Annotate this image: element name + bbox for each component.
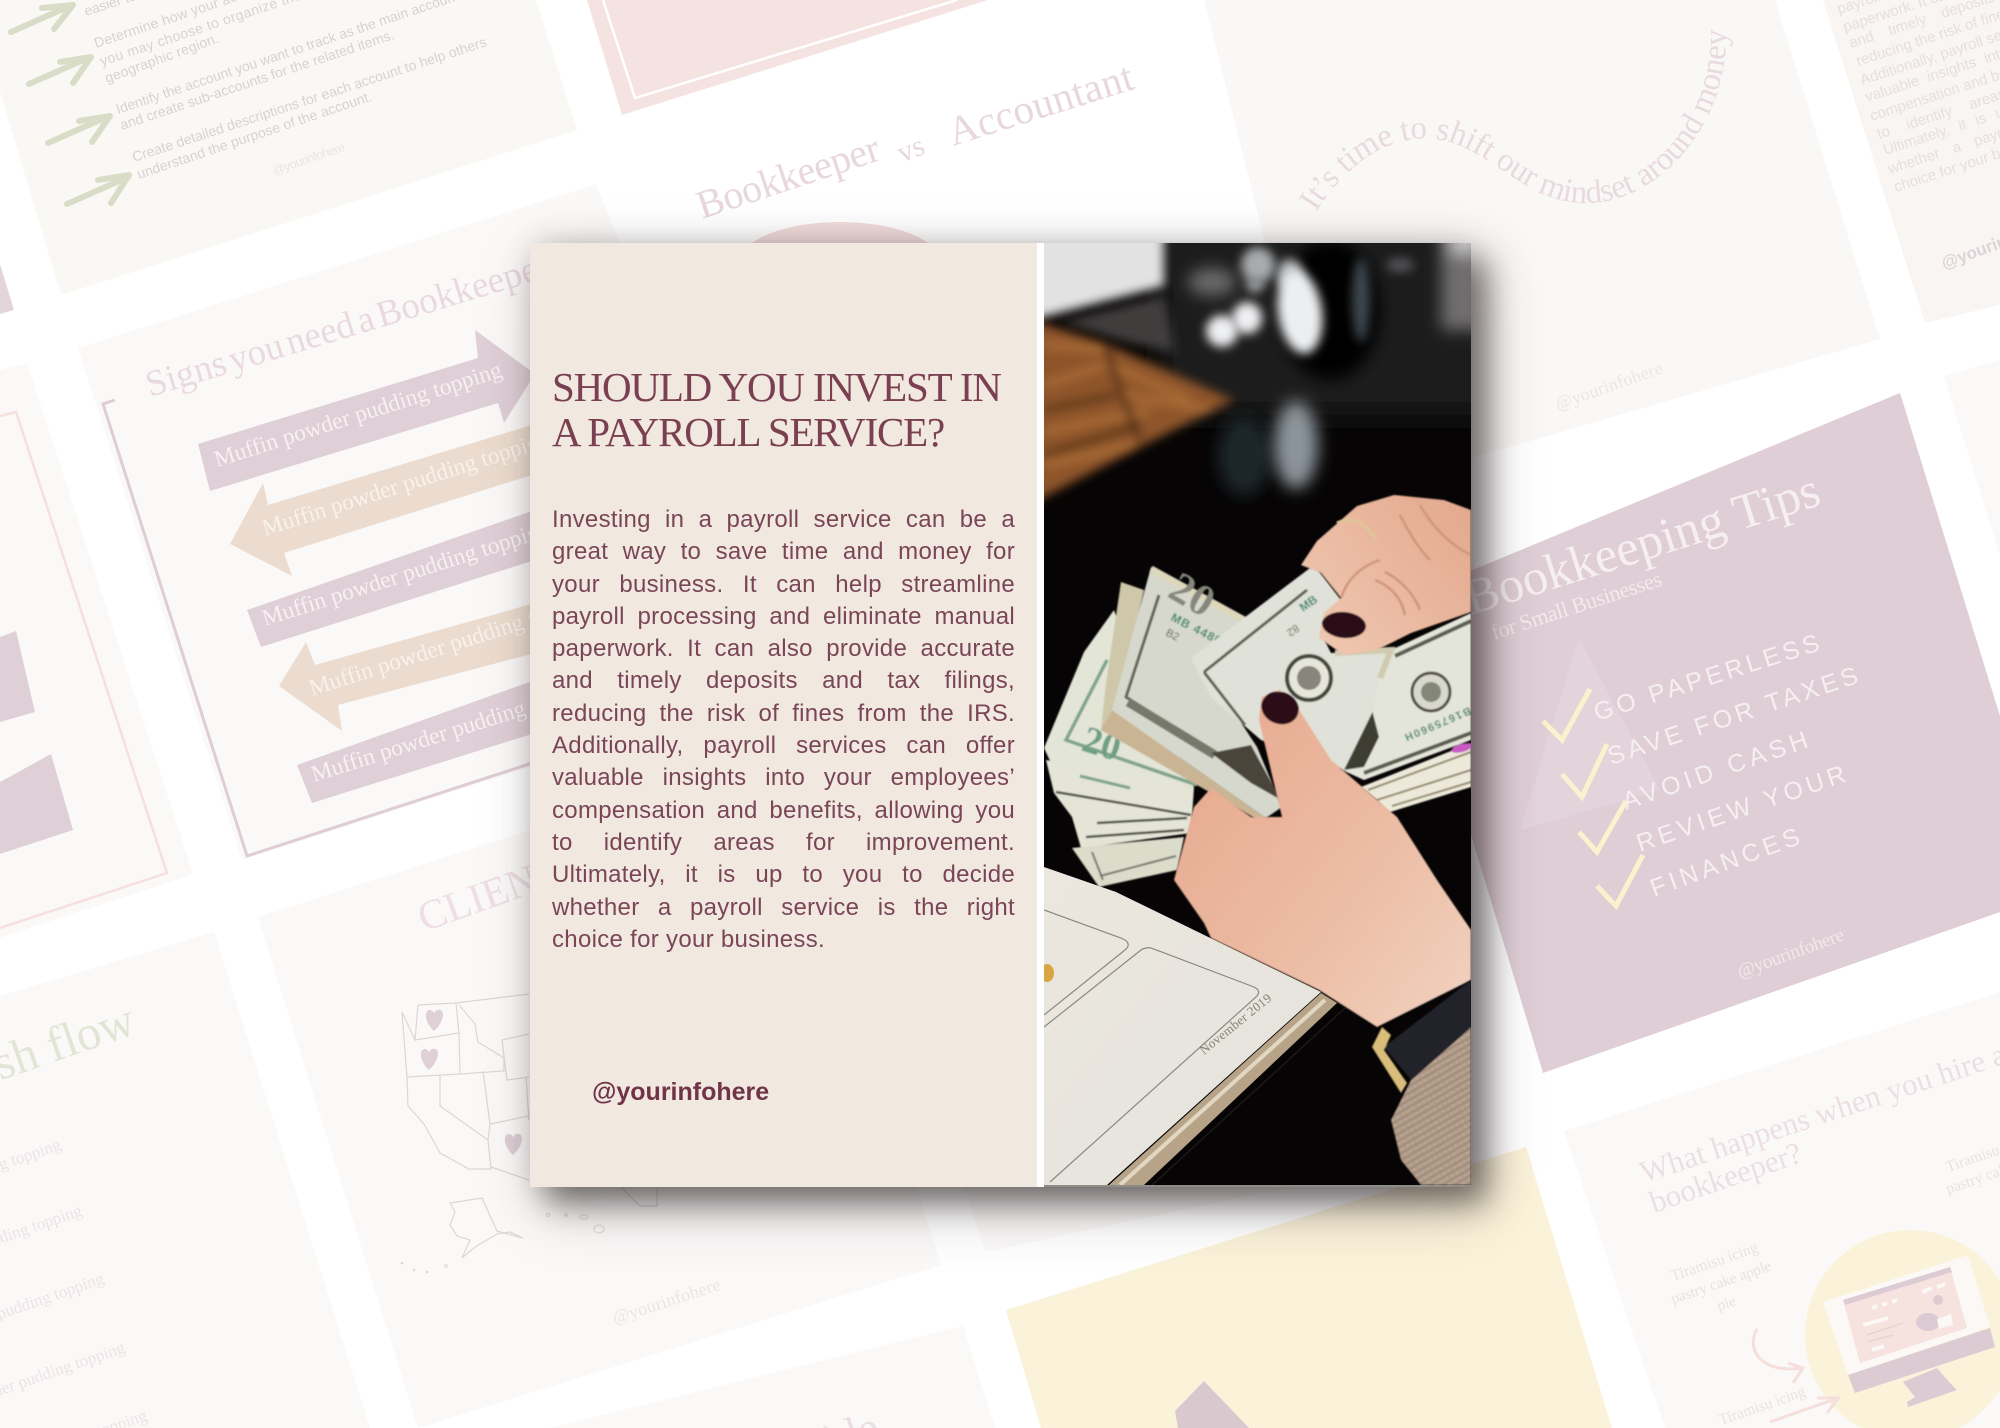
checklist: AVOID CASH: [1619, 726, 1811, 816]
card: pink corner: [587, 0, 988, 115]
title: SHOULD YOU INVEST IN: [552, 364, 1001, 410]
green arrows: [11, 5, 129, 204]
card: bookkeeping tips: [1400, 393, 2000, 1073]
curved quote: It’s time to shift our mindset around money: [1298, 30, 1734, 211]
right fan: [1342, 613, 1471, 780]
body paragraph: valuable insights into your employees’: [552, 764, 1015, 791]
bills: 20: [1161, 562, 1224, 627]
heading: Signs you need a Bookkeeper: [141, 245, 554, 406]
card: guide: [550, 1326, 995, 1428]
illustration: computer in circle: [1805, 1230, 2000, 1428]
nail: [1321, 610, 1367, 640]
card: left edge with mauve blocks: [0, 363, 193, 938]
card: chart of accounts tips: [0, 0, 577, 295]
card: bookkeeper vs accountant: [691, 53, 1139, 302]
tweed sleeve: [1391, 1027, 1471, 1185]
checklist: REVIEW YOUR: [1633, 760, 1849, 858]
caption left: pie: [1715, 1293, 1738, 1315]
checklist: [1590, 629, 1861, 903]
heading: vs: [892, 129, 929, 169]
card: cash flow: [0, 932, 370, 1428]
bills: MB: [1297, 592, 1320, 614]
arrow 2: Muffin powder pudding topping: [259, 426, 554, 542]
bills: B1675960H: [1401, 704, 1471, 744]
blurred background: [1000, 200, 1490, 496]
map hearts: [421, 1010, 522, 1155]
body paragraph: your business. It can help streamline: [552, 571, 1015, 598]
body paragraph: Ultimately, it is up to you to decide: [552, 861, 1015, 888]
arrow 1: Muffin powder pudding topping: [211, 357, 506, 473]
body paragraph: compensation and benefits, allowing you: [552, 797, 1015, 824]
bills: MB 4486: [1169, 610, 1225, 648]
card sliver: top-left mauve: [0, 264, 14, 314]
heading: [691, 53, 1139, 228]
card: signs you need a bookkeeper: [78, 184, 800, 860]
handle: @yourinfohere: [1735, 925, 1847, 983]
handle: @yourinfohere: [1553, 358, 1665, 414]
body paragraph: great way to save time and money for: [552, 538, 1015, 565]
notebook date: November 2019: [1196, 990, 1274, 1057]
tip text lines: understand the purpose of the account.: [135, 88, 374, 182]
tip text lines: Create detailed descriptions for each account to help others: [130, 33, 488, 165]
body paragraph: Additionally, payroll services can offer: [552, 732, 1015, 759]
front twenty: [1112, 567, 1282, 818]
body paragraph: paperwork. It can also provide accurate: [552, 635, 1015, 662]
ring: [1337, 520, 1377, 540]
Alaska: [450, 1198, 523, 1258]
handle: @yourinfohere: [270, 140, 347, 178]
watch: [1372, 980, 1471, 1093]
faint house motif: [1520, 638, 1660, 830]
title: [552, 364, 1001, 455]
tip text lines: [82, 0, 488, 182]
check marks: [1543, 689, 1643, 906]
arrow 1: [198, 330, 535, 491]
checklist: GO PAPERLESS: [1590, 629, 1823, 727]
caption left: pastry cake apple: [1669, 1257, 1774, 1308]
body paragraph: payroll processing and eliminate manual: [552, 603, 1015, 630]
heading: Accountant: [942, 53, 1139, 155]
card sliver: right edge: [1944, 360, 2000, 555]
screen details: [1863, 1284, 1945, 1350]
body paragraph: and timely deposits and tax filings,: [552, 667, 1015, 694]
upper hand: [1301, 495, 1471, 655]
notebook: [1040, 867, 1471, 1187]
arrow 3: Muffin powder pudding topping: [259, 516, 554, 632]
heading: CLIENTS: [412, 840, 590, 941]
map islands: [401, 1213, 604, 1273]
heading: bookkeeper?: [1645, 1135, 1806, 1220]
left text column: [530, 243, 1037, 1187]
body paragraph: to identify areas for improvement.: [552, 829, 1015, 856]
bills: [1044, 562, 1474, 887]
photo: hands counting dollar bills: [1044, 243, 1471, 1187]
heading: Bookkeeping Tips: [1457, 461, 1826, 625]
caption left: Tiramisu icing: [1717, 1383, 1808, 1428]
checklist: FINANCES: [1646, 823, 1804, 903]
bills: B2: [1164, 627, 1181, 644]
handle: @yourinfohere: [610, 1274, 723, 1328]
card: shift our mindset quote: [1204, 0, 1880, 448]
title: A PAYROLL SERVICE?: [552, 409, 944, 455]
tip text lines: geographic region.: [103, 30, 221, 86]
curved arrows: [1753, 1329, 1838, 1422]
body paragraph: choice for your business.: [552, 926, 825, 953]
card: yellow with house: [1006, 1147, 1612, 1428]
caption left: [1669, 1130, 2000, 1428]
list lines: [0, 1135, 150, 1428]
body paragraph: [552, 506, 1015, 953]
subheading: for Small Businesses: [1488, 566, 1665, 645]
US map outline: [402, 994, 657, 1258]
tan back bill: [1101, 582, 1144, 730]
arrow 4: Muffin powder pudding topping: [306, 586, 601, 702]
tip text lines: and create sub-accounts for the related items.: [118, 26, 396, 133]
body paragraph: reducing the risk of fines from the IRS.: [552, 700, 1015, 727]
arrow 2: [230, 424, 554, 576]
bills: 82: [1284, 622, 1301, 638]
lower hand: [1174, 686, 1471, 1027]
gold pin: [1040, 964, 1054, 982]
table: [1044, 243, 1471, 1187]
back fan: [1044, 610, 1194, 787]
checklist: SAVE FOR TAXES: [1604, 661, 1861, 771]
wood tray: [1000, 310, 1234, 520]
body paragraph: whether a payroll service is the right: [552, 894, 1015, 921]
heading: Bookkeeper: [691, 125, 885, 228]
caption left: Tiramisu icing: [1669, 1239, 1761, 1285]
right twenty with seal: [1191, 565, 1391, 770]
notebook boxes: [1044, 910, 1259, 1182]
bills: 20: [1077, 718, 1126, 770]
frame: [103, 400, 560, 856]
card: clients map: [258, 750, 941, 1428]
arrow 5: Muffin powder pudding topping: [308, 672, 603, 788]
handle: @yourinfohere: [592, 1078, 769, 1106]
card: payroll copy far right: [1823, 0, 2000, 323]
card: what happens when you hire a bookkeeper: [1564, 992, 2000, 1428]
nail: [1257, 686, 1303, 730]
card sliver behind panel: [965, 1187, 1290, 1252]
main panel: [530, 243, 1471, 1187]
heading: What happens when you hire a: [1635, 1036, 2000, 1190]
body paragraph: Investing in a payroll service can be a: [552, 506, 1015, 533]
